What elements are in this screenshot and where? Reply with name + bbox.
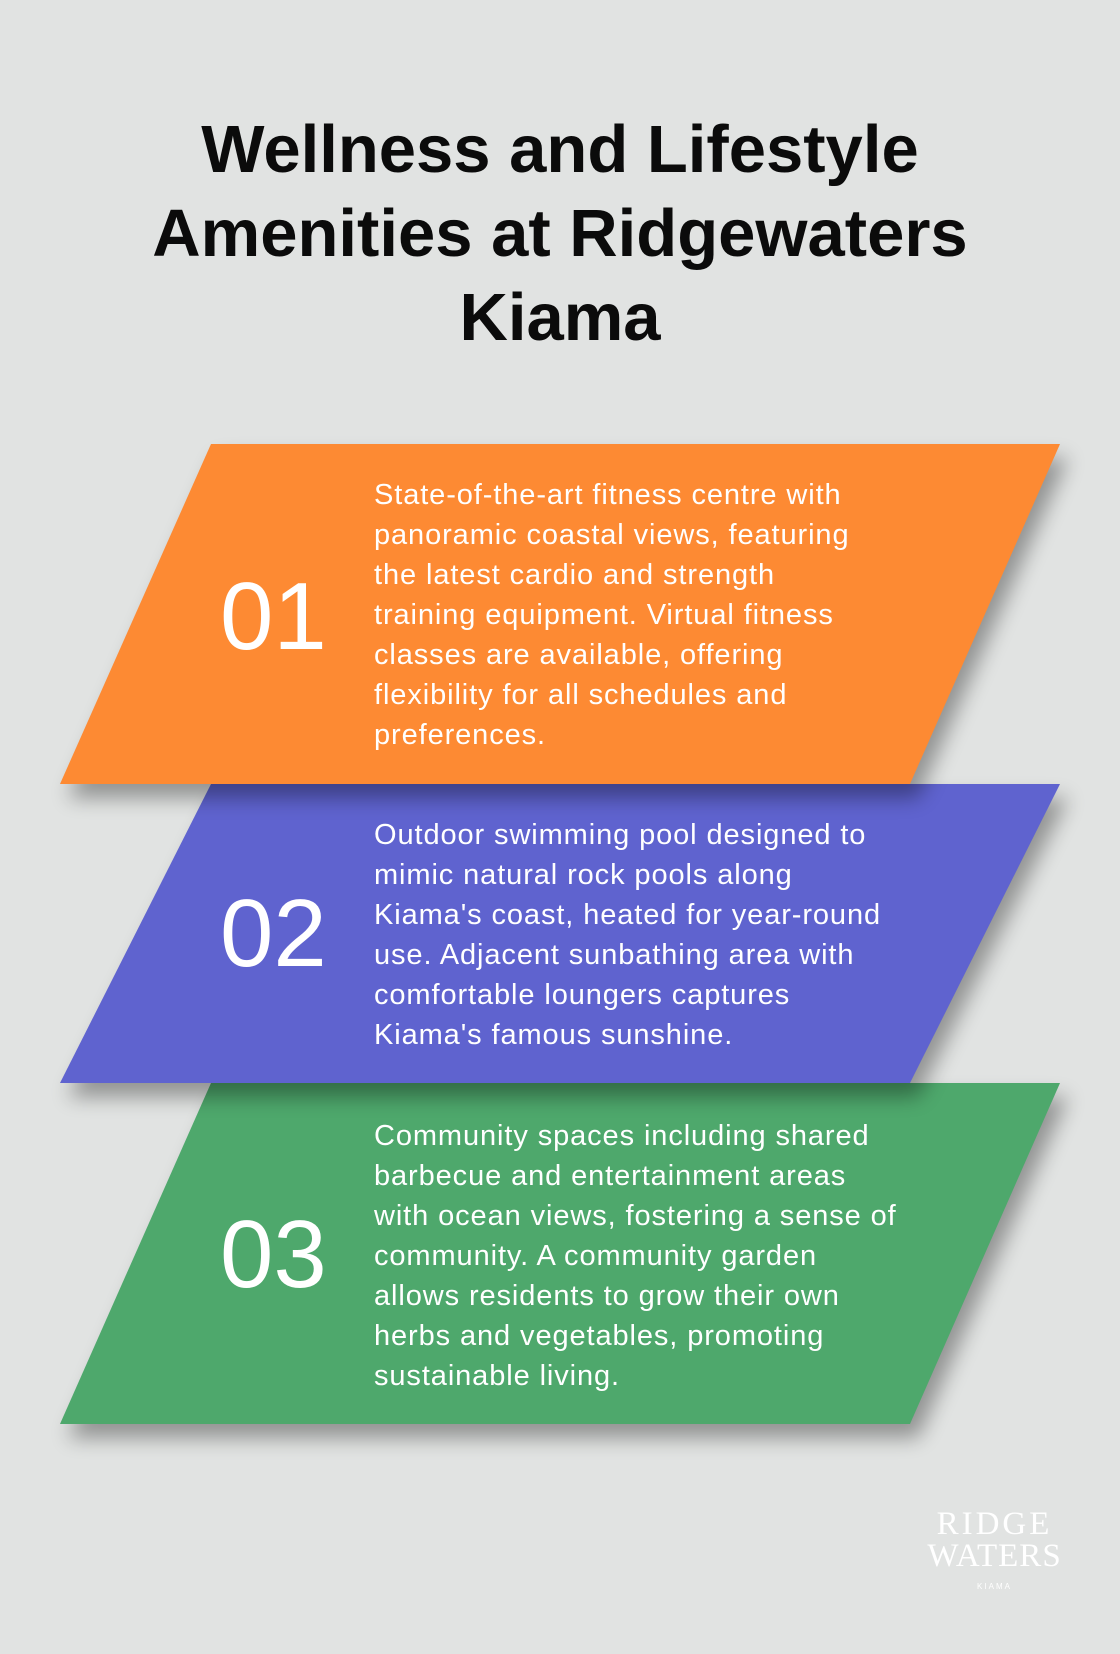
text 02	[374, 819, 881, 1051]
text 02: Kiama's famous sunshine.	[374, 1019, 733, 1051]
text 01: training equipment. Virtual fitness	[374, 599, 834, 631]
text 03	[374, 1120, 897, 1392]
text 03: herbs and vegetables, promoting	[374, 1320, 824, 1352]
logo: RIDGE	[937, 1506, 1052, 1542]
text 01: the latest cardio and strength	[374, 559, 775, 591]
text 01: preferences.	[374, 719, 546, 751]
text 03: with ocean views, fostering a sense of	[374, 1200, 897, 1232]
text 02: comfortable loungers captures	[374, 979, 790, 1011]
text 03: community. A community garden	[374, 1240, 817, 1272]
number 03: 03	[220, 1201, 327, 1308]
text 01	[374, 479, 849, 751]
text 01: panoramic coastal views, featuring	[374, 519, 849, 551]
number 01: 01	[220, 563, 327, 670]
logo: KIAMA	[977, 1582, 1012, 1591]
title	[152, 112, 968, 355]
text 02: use. Adjacent sunbathing area with	[374, 939, 854, 971]
text 02: Outdoor swimming pool designed to	[374, 819, 866, 851]
text 03: allows residents to grow their own	[374, 1280, 840, 1312]
text 02: mimic natural rock pools along	[374, 859, 793, 891]
text 03: sustainable living.	[374, 1360, 620, 1392]
panel shape: 01	[60, 444, 1068, 798]
number 02: 02	[220, 880, 327, 987]
logo	[927, 1506, 1062, 1591]
text 03: barbecue and entertainment areas	[374, 1160, 846, 1192]
title: Kiama	[459, 280, 661, 355]
text 02: Kiama's coast, heated for year-round	[374, 899, 881, 931]
text 01: flexibility for all schedules and	[374, 679, 787, 711]
text 03: Community spaces including shared	[374, 1120, 870, 1152]
title: Amenities at Ridgewaters	[152, 196, 968, 271]
panel shape: 03	[60, 1083, 1068, 1438]
text 01: State-of-the-art fitness centre with	[374, 479, 842, 511]
title: Wellness and Lifestyle	[201, 112, 919, 187]
panel shape: 02	[60, 784, 1068, 1097]
logo: WATERS	[927, 1538, 1062, 1574]
text 01: classes are available, offering	[374, 639, 783, 671]
